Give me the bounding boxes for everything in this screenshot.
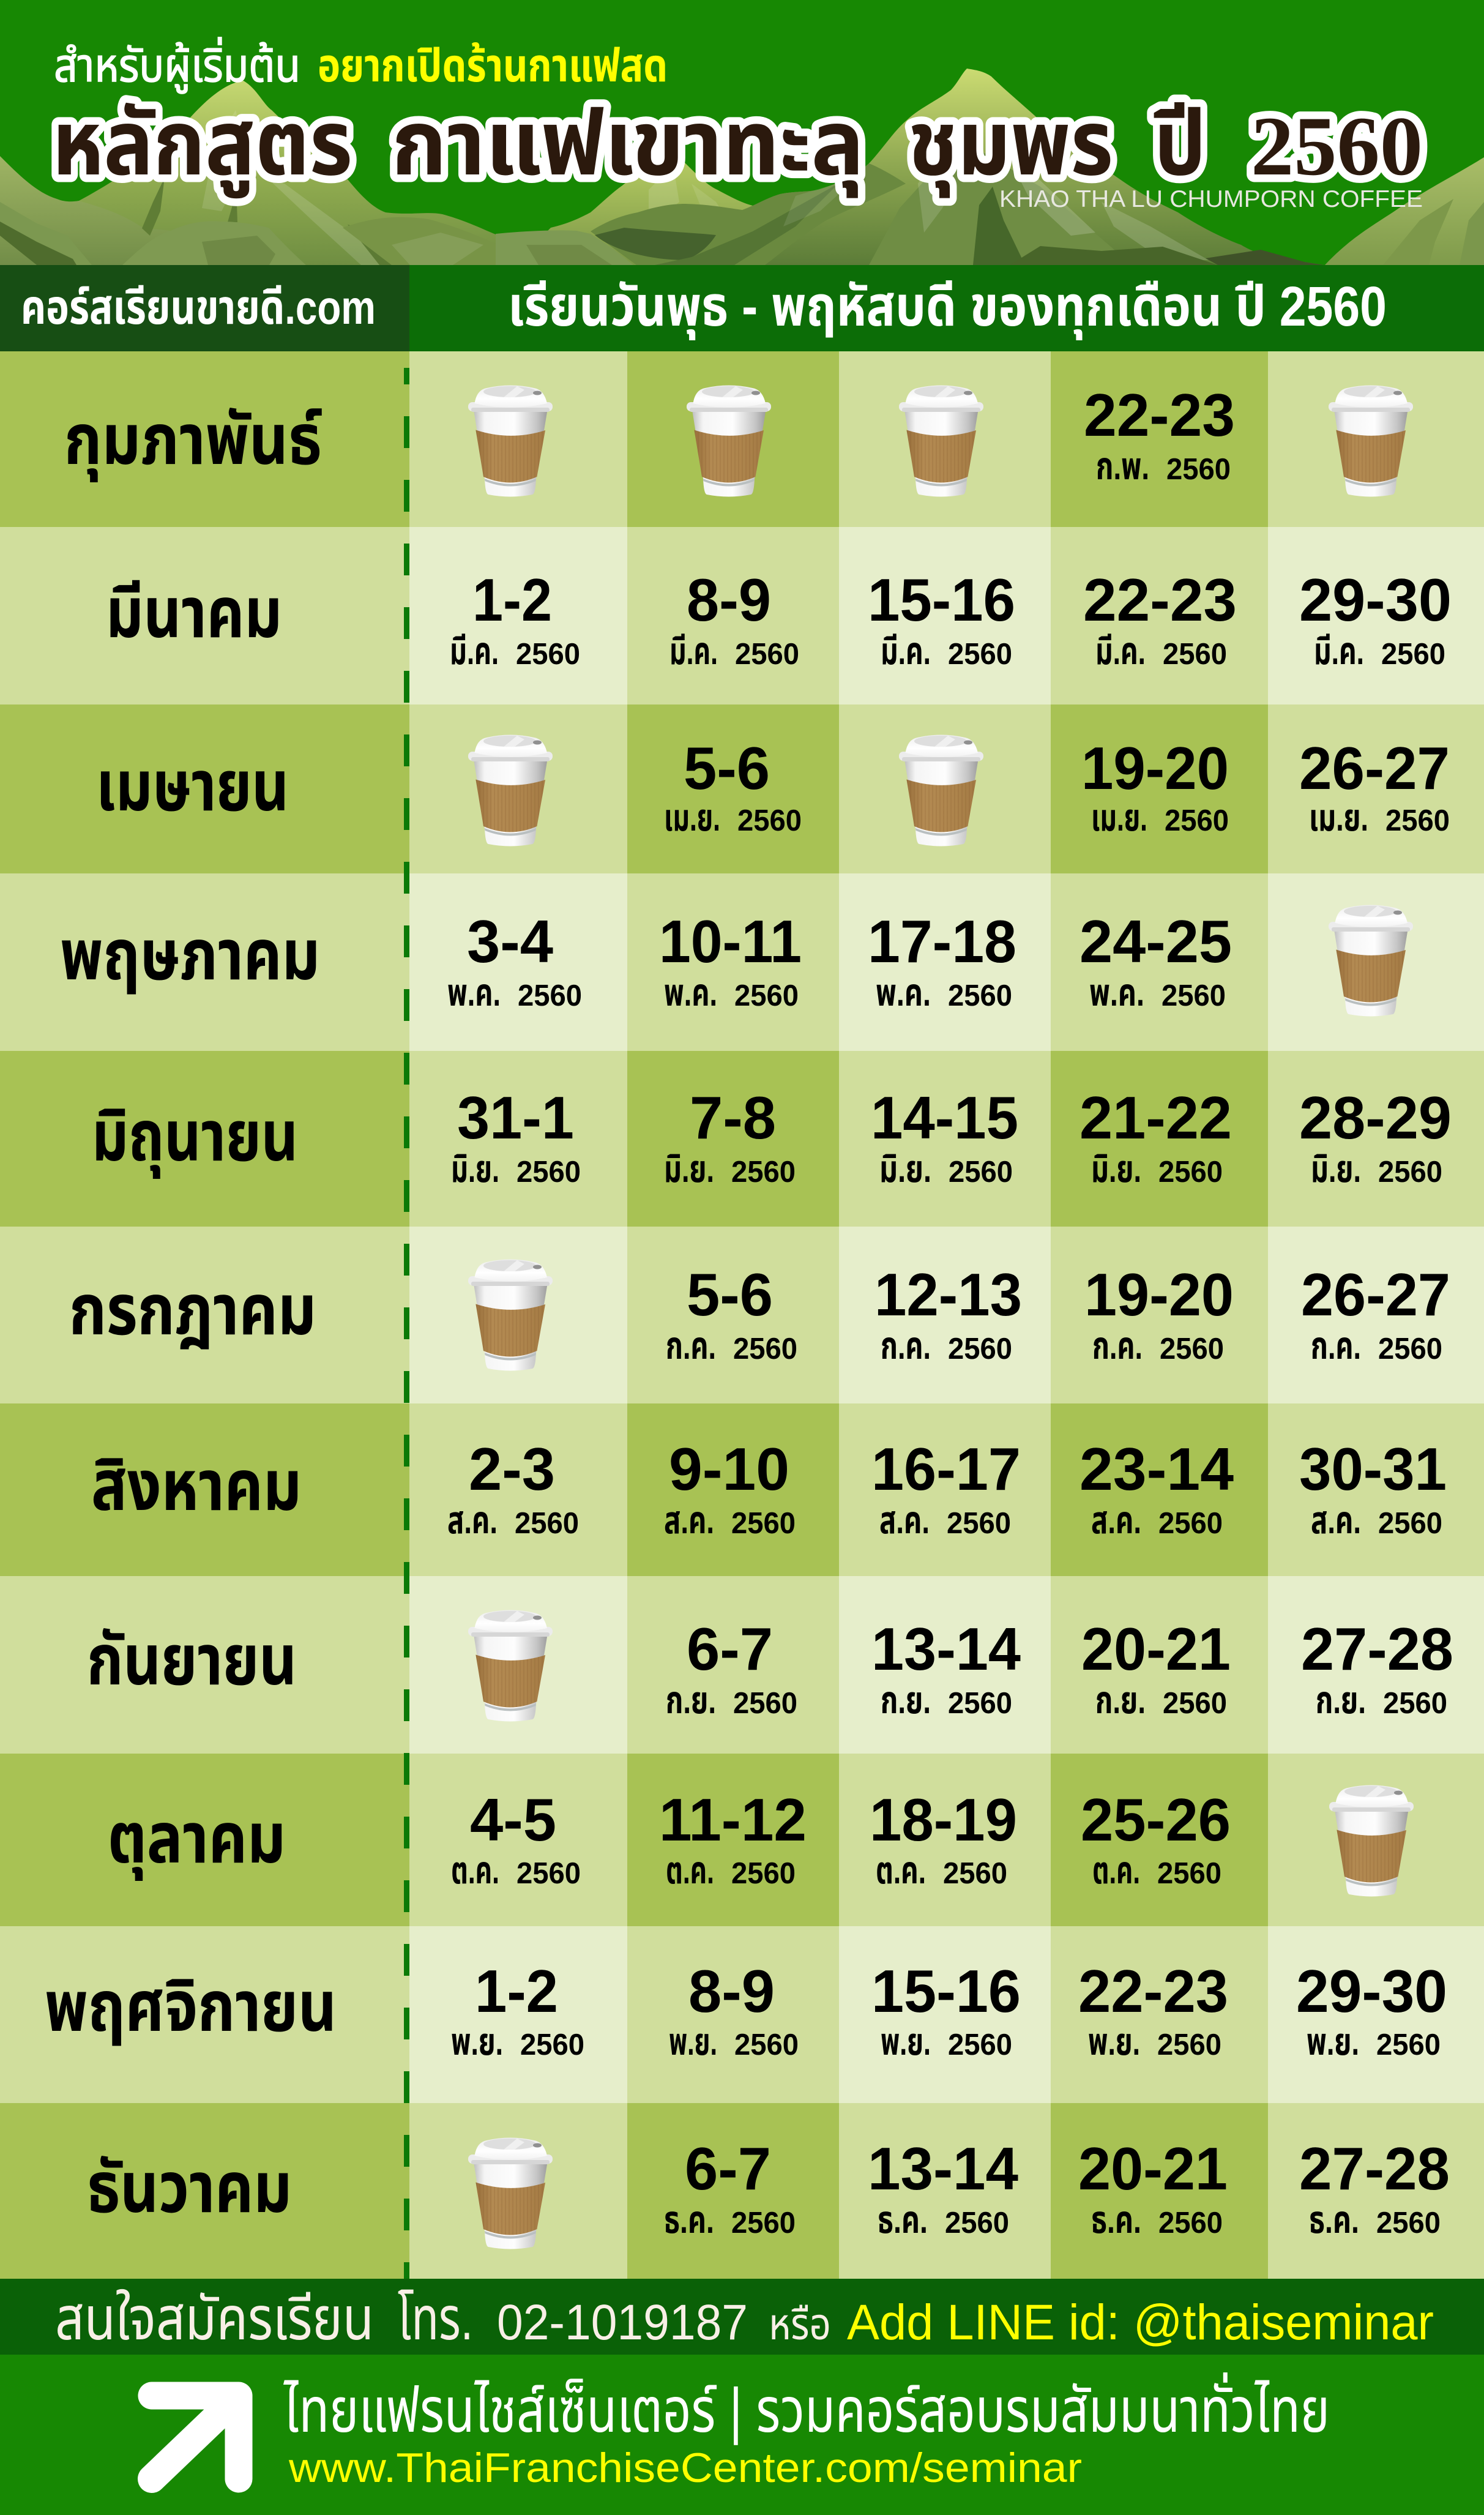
date: 22-23: 2560 bbox=[1157, 2028, 1221, 2061]
date: 15-16 bbox=[871, 1957, 1021, 2063]
date: 14-15: มิ.ย. bbox=[879, 1148, 931, 1190]
date: 8-9: 8-9 bbox=[687, 566, 771, 633]
dashed divider bbox=[404, 368, 409, 2279]
date: 22-23: 22-23 bbox=[1078, 1957, 1228, 2025]
date: 15-16: 2560 bbox=[948, 638, 1012, 671]
contact phone text: โทร. bbox=[398, 2285, 473, 2352]
date: 8-9 bbox=[669, 1957, 799, 2063]
date: 27-28: ก.ย. bbox=[1316, 1680, 1366, 1722]
date: 31-1 bbox=[451, 1084, 581, 1190]
month label: มีนาคม bbox=[106, 573, 282, 652]
date: 27-28: 2560 bbox=[1376, 2207, 1441, 2240]
date: 13-14: 2560 bbox=[948, 1687, 1012, 1720]
date: 22-23 bbox=[1083, 566, 1237, 673]
date: 31-1: 31-1 bbox=[457, 1084, 574, 1151]
date: 11-12: ต.ค. bbox=[666, 1850, 714, 1892]
panel: calendar grid backgrounds bbox=[0, 351, 1484, 2279]
english tagline: KHAO THA LU CHUMPORN COFFEE bbox=[999, 186, 1423, 212]
date: 14-15 bbox=[871, 1084, 1018, 1190]
date: 9-10: 9-10 bbox=[669, 1435, 789, 1503]
date: 4-5 bbox=[451, 1786, 581, 1892]
date: 19-20 bbox=[1081, 734, 1229, 839]
date: 11-12: 2560 bbox=[731, 1857, 796, 1890]
date: 20-21: 2560 bbox=[1163, 1687, 1227, 1720]
date: 16-17: ส.ค. bbox=[879, 1500, 930, 1542]
date: 25-26: ต.ค. bbox=[1092, 1850, 1140, 1892]
date: 9-10 bbox=[664, 1435, 796, 1542]
date: 5-6: 5-6 bbox=[687, 1261, 773, 1328]
contact phone text: หรือ bbox=[769, 2300, 831, 2349]
date: 14-15: 2560 bbox=[949, 1156, 1013, 1189]
date: 31-1: 2560 bbox=[516, 1156, 581, 1189]
panel: header bar left bbox=[0, 265, 409, 351]
date: 15-16: 15-16 bbox=[871, 1957, 1021, 2025]
date: 5-6: 2560 bbox=[737, 804, 802, 837]
date: 24-25 bbox=[1079, 908, 1232, 1014]
date: 27-28: ธ.ค. bbox=[1309, 2199, 1359, 2241]
date: 22-23: มี.ค. bbox=[1095, 630, 1146, 673]
title: หลักสูตร bbox=[52, 93, 352, 198]
date: 4-5: 4-5 bbox=[470, 1786, 556, 1853]
date: 10-11 bbox=[659, 908, 802, 1014]
row: February bbox=[64, 381, 1413, 497]
contact phone text bbox=[55, 2285, 831, 2352]
date: 23-14: ส.ค. bbox=[1091, 1500, 1141, 1542]
date: 8-9: มี.ค. bbox=[669, 630, 718, 673]
date: 28-29: มิ.ย. bbox=[1311, 1148, 1361, 1190]
date: 1-2: 1-2 bbox=[475, 1957, 558, 2025]
date: 20-21: 20-21 bbox=[1081, 1615, 1231, 1683]
icon: coffee cup bbox=[468, 386, 553, 497]
date: 24-25: 2560 bbox=[1161, 979, 1226, 1012]
date: 5-6 bbox=[664, 734, 802, 839]
date: 17-18: 17-18 bbox=[868, 908, 1016, 975]
date: 29-30: มี.ค. bbox=[1314, 630, 1364, 673]
date: 7-8 bbox=[664, 1084, 796, 1190]
title: 2560 bbox=[1251, 99, 1423, 193]
date: 28-29: 28-29 bbox=[1299, 1084, 1452, 1151]
date: 13-14 bbox=[868, 2135, 1018, 2241]
date: 16-17 bbox=[871, 1435, 1021, 1542]
date: 10-11: 2560 bbox=[734, 979, 799, 1012]
date: 19-20: เม.ย. bbox=[1091, 797, 1147, 839]
date: 29-30: 29-30 bbox=[1299, 566, 1452, 633]
date: 22-23: 2560 bbox=[1166, 453, 1231, 486]
row: October bbox=[108, 1785, 1414, 1896]
date: 13-14: 13-14 bbox=[868, 2135, 1018, 2202]
date: 12-13: ก.ค. bbox=[881, 1325, 931, 1367]
illustration: green mountains bbox=[0, 69, 1484, 265]
month label: มิถุนายน bbox=[92, 1096, 298, 1179]
row: September bbox=[87, 1610, 1453, 1722]
date: 8-9 bbox=[669, 566, 799, 673]
date: 17-18: พ.ค. bbox=[876, 972, 931, 1014]
date: 5-6: 2560 bbox=[733, 1332, 797, 1366]
date: 26-27 bbox=[1301, 1261, 1450, 1367]
date: 13-14: ธ.ค. bbox=[878, 2199, 928, 2241]
date: 6-7: ก.ย. bbox=[666, 1680, 716, 1722]
date: 8-9: 8-9 bbox=[688, 1957, 775, 2025]
date: 2-3: ส.ค. bbox=[447, 1500, 498, 1542]
month label: กรกฎาคม bbox=[69, 1270, 316, 1350]
date: 23-14 bbox=[1079, 1435, 1234, 1542]
date: 8-9: 2560 bbox=[734, 2028, 799, 2061]
month label: กันยายน bbox=[87, 1620, 297, 1700]
date: 25-26 bbox=[1081, 1786, 1231, 1892]
icon: coffee cup bbox=[687, 386, 771, 497]
icon: coffee cup bbox=[1329, 905, 1413, 1016]
date: 23-14: 2560 bbox=[1158, 1507, 1223, 1540]
date: 15-16: 2560 bbox=[948, 2028, 1012, 2061]
date: 1-2: 2560 bbox=[516, 638, 580, 671]
contact phone text: สนใจสมัครเรียน bbox=[55, 2285, 374, 2352]
date: 21-22: มิ.ย. bbox=[1091, 1148, 1141, 1190]
date: 8-9: พ.ย. bbox=[669, 2021, 717, 2063]
date: 25-26: 2560 bbox=[1157, 1857, 1221, 1890]
date: 2-3 bbox=[447, 1435, 579, 1542]
date: 18-19: 2560 bbox=[943, 1857, 1007, 1890]
date: 20-21: ก.ย. bbox=[1095, 1680, 1146, 1722]
date: 13-14: ก.ย. bbox=[881, 1680, 931, 1722]
date: 7-8: 2560 bbox=[731, 1156, 796, 1189]
month label: พฤษภาคม bbox=[60, 915, 320, 995]
date: 21-22 bbox=[1079, 1084, 1232, 1190]
date: 6-7 bbox=[666, 1615, 797, 1722]
panel: footer background bbox=[0, 2355, 1484, 2515]
date: 7-8: 7-8 bbox=[690, 1084, 776, 1151]
contact phone text: 02-1019187 bbox=[497, 2295, 748, 2350]
date: 15-16: มี.ค. bbox=[881, 630, 931, 673]
date: 10-11: พ.ค. bbox=[664, 972, 717, 1014]
date: 15-16: 15-16 bbox=[868, 566, 1015, 633]
date: 18-19: 18-19 bbox=[870, 1786, 1017, 1853]
subtitle bbox=[54, 37, 668, 94]
icon: coffee cup bbox=[468, 734, 553, 846]
row: August bbox=[91, 1435, 1447, 1542]
title: ปี bbox=[1154, 93, 1206, 194]
date: 17-18: 2560 bbox=[948, 979, 1012, 1012]
date: 22-23: พ.ย. bbox=[1088, 2021, 1140, 2063]
date: 29-30 bbox=[1299, 566, 1452, 673]
date: 9-10: ส.ค. bbox=[664, 1500, 714, 1542]
icon: coffee cup bbox=[468, 1610, 553, 1721]
date: 20-21 bbox=[1081, 1615, 1231, 1722]
date: 30-31: ส.ค. bbox=[1311, 1500, 1361, 1542]
date: 26-27: 26-27 bbox=[1299, 734, 1450, 802]
date: 29-30: 2560 bbox=[1381, 638, 1445, 671]
date: 19-20: 19-20 bbox=[1081, 734, 1229, 802]
date: 13-14: 2560 bbox=[945, 2207, 1009, 2240]
date: 12-13 bbox=[874, 1261, 1022, 1367]
panel: header background bbox=[0, 0, 1484, 265]
date: 22-23 bbox=[1078, 1957, 1228, 2063]
date: 29-30 bbox=[1296, 1957, 1447, 2063]
icon: arrow bbox=[152, 2396, 239, 2479]
date: 1-2 bbox=[451, 1957, 584, 2063]
date: 26-27: ก.ค. bbox=[1311, 1325, 1361, 1367]
date: 21-22: 21-22 bbox=[1079, 1084, 1232, 1151]
date: 4-5: 2560 bbox=[516, 1857, 581, 1890]
month label: เมษายน bbox=[96, 746, 289, 826]
date: 3-4: 3-4 bbox=[467, 908, 553, 975]
icon: coffee cup bbox=[1329, 386, 1413, 497]
date: 1-2: มี.ค. bbox=[450, 630, 499, 673]
icon: coffee cup bbox=[899, 386, 983, 497]
date: 29-30: 29-30 bbox=[1296, 1957, 1447, 2025]
date: 2-3: 2-3 bbox=[469, 1435, 555, 1503]
month label: กุมภาพันธ์ bbox=[64, 400, 322, 482]
date: 20-21: 2560 bbox=[1158, 2207, 1223, 2240]
date: 22-23: 22-23 bbox=[1084, 381, 1235, 449]
icon: coffee cup bbox=[899, 734, 983, 846]
date: 3-4: พ.ค. bbox=[447, 972, 501, 1014]
subtitle: สำหรับผู้เริ่มต้น bbox=[54, 37, 300, 94]
row: November bbox=[45, 1957, 1447, 2063]
date: 13-14: 13-14 bbox=[871, 1615, 1021, 1683]
date: 19-20 bbox=[1084, 1261, 1234, 1367]
date: 5-6 bbox=[666, 1261, 797, 1367]
date: 4-5: ต.ค. bbox=[451, 1850, 499, 1892]
date: 19-20: ก.ค. bbox=[1092, 1325, 1143, 1367]
date: 13-14 bbox=[871, 1615, 1021, 1722]
date: 26-27: เม.ย. bbox=[1309, 797, 1368, 839]
date: 27-28 bbox=[1301, 1615, 1453, 1722]
date: 22-23: 2560 bbox=[1163, 638, 1227, 671]
date: 22-23 bbox=[1084, 381, 1235, 488]
date: 30-31: 30-31 bbox=[1299, 1435, 1447, 1503]
date: 19-20: 19-20 bbox=[1084, 1261, 1234, 1328]
date: 28-29: 2560 bbox=[1378, 1156, 1442, 1189]
icon: coffee cup bbox=[468, 2137, 553, 2249]
date: 26-27: 26-27 bbox=[1301, 1261, 1450, 1328]
date: 1-2: 1-2 bbox=[472, 566, 552, 633]
date: 18-19 bbox=[870, 1786, 1017, 1892]
date: 22-23: ก.พ. bbox=[1096, 446, 1149, 488]
date: 29-30: 2560 bbox=[1376, 2028, 1441, 2061]
date: 27-28 bbox=[1299, 2135, 1450, 2241]
date: 12-13: 2560 bbox=[948, 1332, 1012, 1366]
subtitle: อยากเปิดร้านกาแฟสด bbox=[318, 40, 668, 92]
date: 2-3: 2560 bbox=[515, 1507, 579, 1540]
date: 16-17: 16-17 bbox=[871, 1435, 1021, 1503]
date: 30-31 bbox=[1299, 1435, 1447, 1542]
date: 28-29 bbox=[1299, 1084, 1452, 1190]
date: 5-6: เม.ย. bbox=[664, 797, 720, 839]
date: 24-25: พ.ค. bbox=[1089, 972, 1144, 1014]
date: 20-21: 20-21 bbox=[1078, 2135, 1228, 2202]
date: 9-10: 2560 bbox=[731, 1507, 796, 1540]
title: ชุมพร bbox=[908, 93, 1113, 198]
month label: พฤศจิกายน bbox=[45, 1967, 337, 2046]
date: 17-18 bbox=[868, 908, 1016, 1014]
date: 7-8: มิ.ย. bbox=[664, 1148, 714, 1190]
date: 31-1: มิ.ย. bbox=[451, 1148, 499, 1190]
date: 1-2: พ.ย. bbox=[451, 2021, 503, 2063]
date: 27-28: 27-28 bbox=[1299, 2135, 1450, 2202]
title bbox=[52, 93, 1423, 198]
date: 27-28: 2560 bbox=[1383, 1687, 1447, 1720]
date: 18-19: ต.ค. bbox=[876, 1850, 926, 1892]
date: 25-26: 25-26 bbox=[1081, 1786, 1231, 1853]
month label: ธันวาคม bbox=[87, 2148, 292, 2227]
row: July bbox=[69, 1260, 1450, 1371]
date: 27-28: 27-28 bbox=[1301, 1615, 1453, 1683]
date: 1-2: 2560 bbox=[520, 2028, 584, 2061]
date: 12-13: 12-13 bbox=[874, 1261, 1022, 1328]
row: June bbox=[92, 1084, 1452, 1190]
icon: coffee cup bbox=[468, 1260, 553, 1371]
date: 16-17: 2560 bbox=[947, 1507, 1011, 1540]
row: March bbox=[106, 566, 1452, 673]
line id text: Add LINE id: @thaiseminar bbox=[847, 2295, 1434, 2350]
date: 8-9: 2560 bbox=[735, 638, 799, 671]
title: กาแฟเขาทะลุ bbox=[392, 93, 864, 198]
date: 20-21 bbox=[1078, 2135, 1228, 2241]
date: 6-7: ธ.ค. bbox=[664, 2199, 714, 2241]
date: 21-22: 2560 bbox=[1158, 1156, 1223, 1189]
row: April bbox=[96, 734, 1450, 846]
date: 26-27: 2560 bbox=[1378, 1332, 1442, 1366]
date: 11-12: 11-12 bbox=[659, 1786, 807, 1853]
date: 6-7: 6-7 bbox=[685, 2135, 771, 2202]
panel: header bar left: คอร์สเรียนขายดี.com bbox=[21, 280, 376, 334]
icon: coffee cup bbox=[1329, 1785, 1414, 1896]
date: 24-25: 24-25 bbox=[1079, 908, 1232, 975]
month label: ตุลาคม bbox=[108, 1798, 286, 1881]
row: May bbox=[60, 905, 1413, 1016]
date: 15-16 bbox=[868, 566, 1015, 673]
date: 1-2 bbox=[450, 566, 580, 673]
date: 5-6: ก.ค. bbox=[666, 1325, 716, 1367]
date: 6-7 bbox=[664, 2135, 796, 2241]
row: December bbox=[87, 2135, 1450, 2249]
date: 19-20: 2560 bbox=[1165, 804, 1229, 837]
date: 3-4: 2560 bbox=[518, 979, 582, 1012]
date: 5-6: 5-6 bbox=[684, 734, 770, 802]
date: 6-7: 2560 bbox=[733, 1687, 797, 1720]
date: 30-31: 2560 bbox=[1378, 1507, 1442, 1540]
panel: header bar right bbox=[409, 265, 1484, 351]
date: 23-14: 23-14 bbox=[1079, 1435, 1234, 1503]
panel: contact bar bbox=[0, 2279, 1484, 2355]
date: 19-20: 2560 bbox=[1160, 1332, 1224, 1366]
date: 6-7: 6-7 bbox=[687, 1615, 773, 1683]
footer url: www.ThaiFranchiseCenter.com/seminar bbox=[288, 2445, 1082, 2491]
date: 14-15: 14-15 bbox=[871, 1084, 1018, 1151]
date: 26-27 bbox=[1299, 734, 1450, 839]
date: 20-21: ธ.ค. bbox=[1091, 2199, 1141, 2241]
date: 15-16: พ.ย. bbox=[881, 2021, 931, 2063]
date: 6-7: 2560 bbox=[731, 2207, 796, 2240]
month label: สิงหาคม bbox=[91, 1446, 302, 1525]
date: 26-27: 2560 bbox=[1385, 804, 1450, 837]
date: 22-23: 22-23 bbox=[1083, 566, 1237, 633]
date: 10-11: 10-11 bbox=[659, 908, 802, 975]
date: 11-12 bbox=[659, 1786, 807, 1892]
date: 3-4 bbox=[447, 908, 582, 1014]
date: 29-30: พ.ย. bbox=[1307, 2021, 1359, 2063]
